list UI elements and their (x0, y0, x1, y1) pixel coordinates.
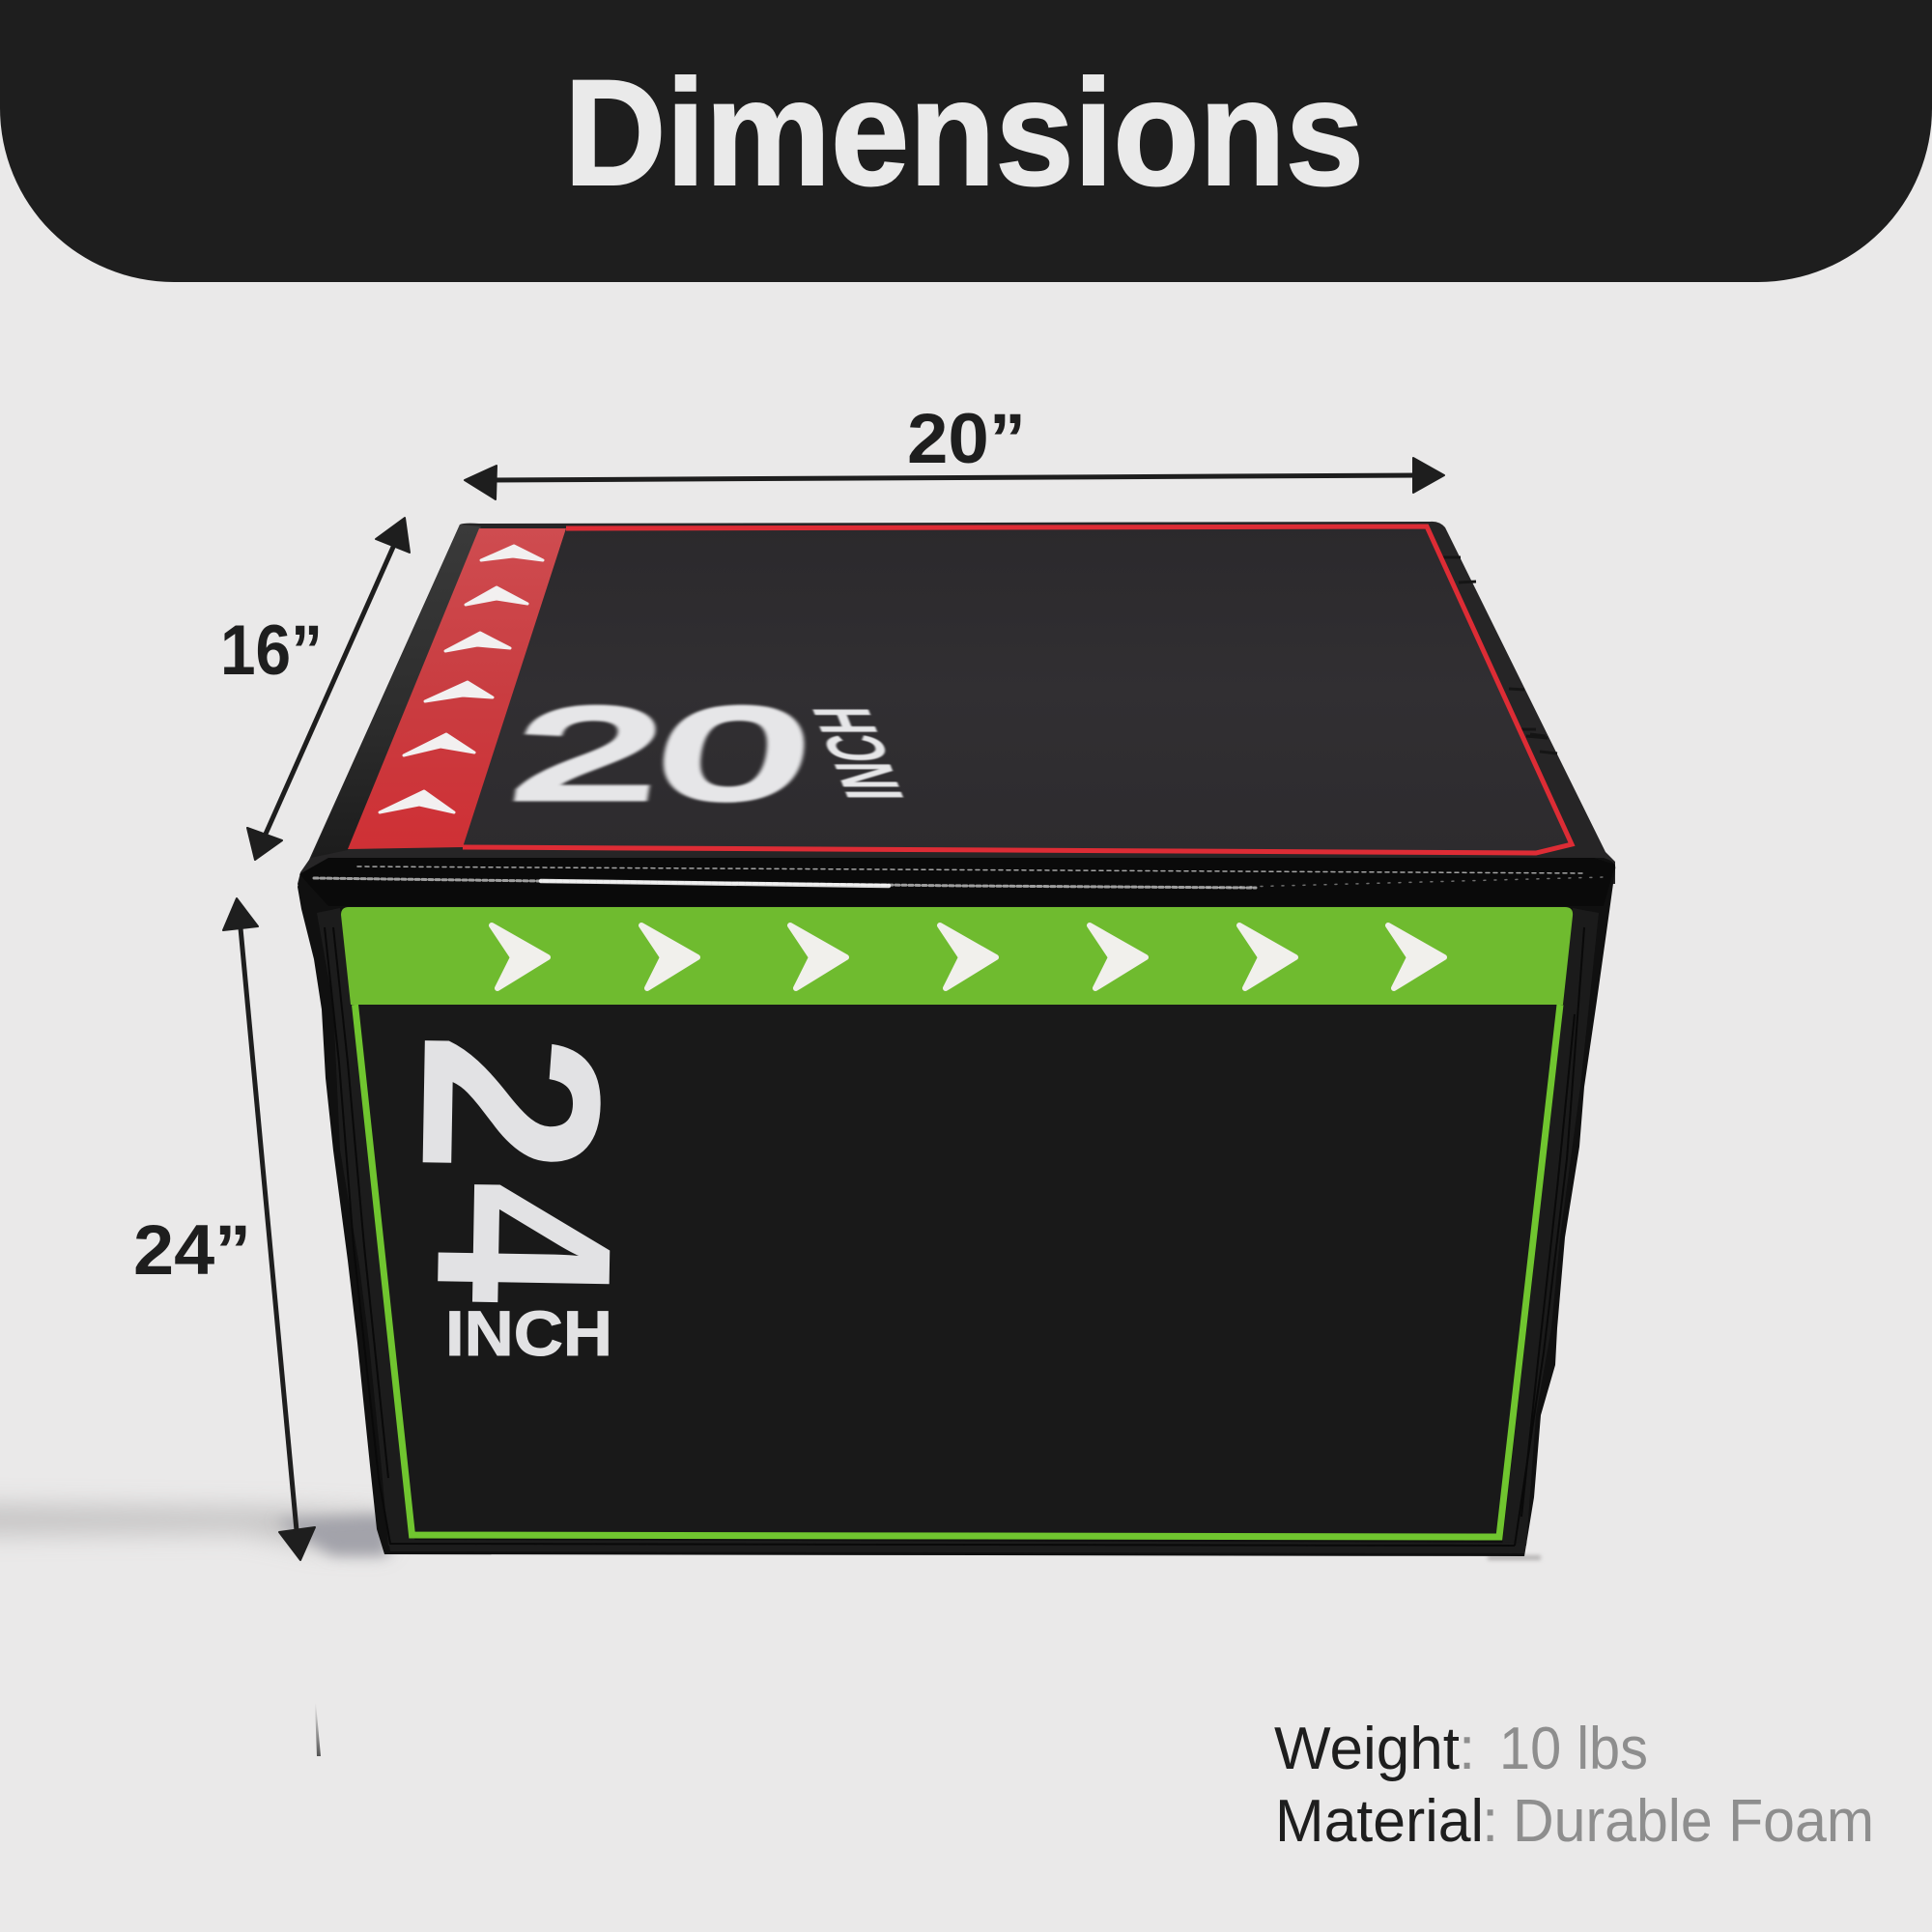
title: Dimensions (564, 49, 1364, 217)
right side flap (1502, 908, 1599, 1546)
weight spec: : (1459, 1716, 1475, 1782)
material spec: : (1482, 1788, 1498, 1855)
depth arrow (247, 518, 410, 860)
floor shadow (0, 1503, 1541, 1560)
side seams (325, 927, 1584, 1546)
weight spec: Weight (1274, 1716, 1460, 1782)
left side flap (317, 908, 415, 1546)
green band (341, 907, 1573, 1005)
stray line fragment (315, 1703, 321, 1756)
white up chevrons (380, 546, 543, 812)
material spec: Durable Foam (1513, 1788, 1874, 1855)
glossy seam (314, 867, 1604, 888)
depth label: 16” (220, 611, 323, 690)
top face side wrinkles (1439, 557, 1557, 753)
bottom flap (388, 1540, 1526, 1553)
plyo box product (298, 522, 1615, 1556)
header band (0, 0, 1932, 282)
height arrow (223, 898, 315, 1560)
red border line (463, 526, 1572, 853)
width label: 20” (907, 400, 1026, 478)
width arrow (465, 458, 1444, 499)
weight spec: 10 lbs (1499, 1716, 1648, 1782)
digit 4: 4 (384, 1179, 664, 1306)
white right chevrons (492, 925, 1444, 988)
height label: 24” (133, 1211, 251, 1290)
top face dark panel (463, 526, 1572, 853)
printed 24 rotated on front (368, 1031, 664, 1306)
printed INCH on front: INCH (445, 1297, 612, 1369)
printed INCH rotated on top: INCH (794, 707, 922, 800)
material spec: Material (1275, 1788, 1484, 1855)
box front face (298, 858, 1615, 1556)
front panel black area (355, 1005, 1563, 1536)
left rim of top face (311, 525, 481, 858)
box top face outer cover (298, 522, 1615, 894)
printed 20: 20 (503, 682, 818, 826)
red arrow strip (348, 528, 566, 849)
top rim black band (299, 858, 1615, 906)
green frame line (355, 1005, 1560, 1537)
digit 2: 2 (368, 1031, 654, 1177)
